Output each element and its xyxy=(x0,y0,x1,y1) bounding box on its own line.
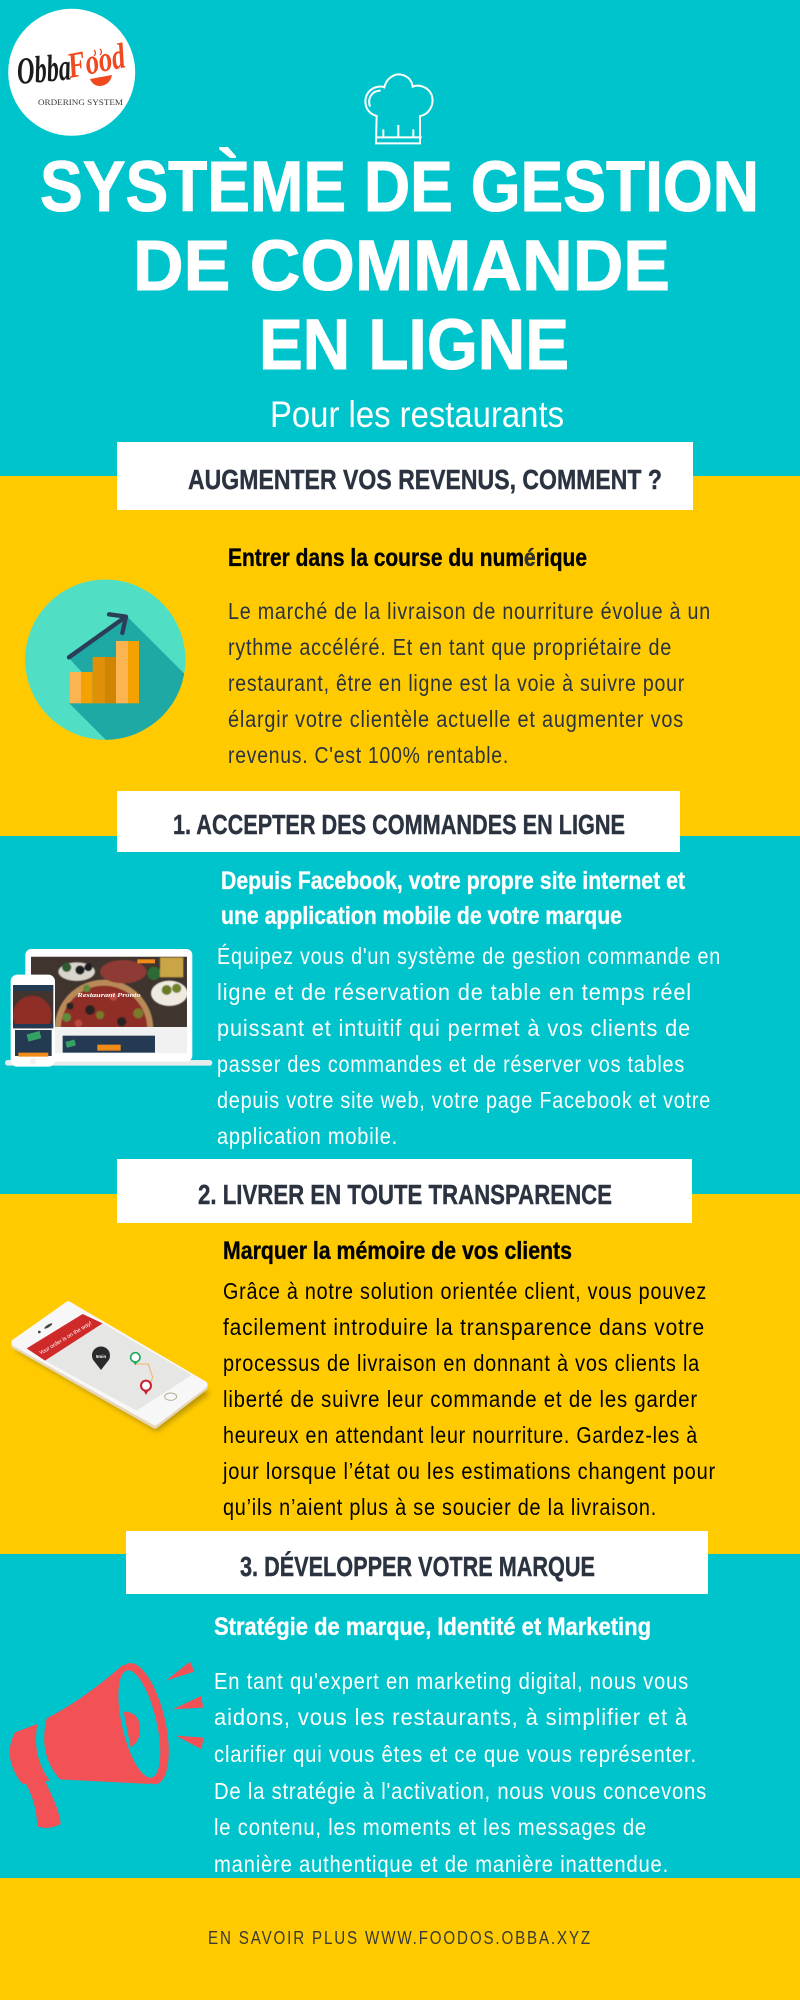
paragraph: qu’ils n’aient plus à se soucier de la livraison. xyxy=(223,1494,657,1520)
paragraph: puissant et intuitif qui permet à vos clients de xyxy=(217,1015,691,1041)
paragraph: depuis votre site web, votre page Facebook et votre xyxy=(217,1087,711,1113)
paragraph: rythme accéléré. Et en tant que propriétaire de xyxy=(228,634,672,660)
phone xyxy=(11,975,55,1067)
paragraph: passer des commandes et de réserver vos tables xyxy=(217,1051,685,1077)
heading bar: accepter des commandes xyxy=(117,791,680,852)
title: EN LIGNE xyxy=(259,306,569,385)
subheading: Marquer la mémoire de vos clients xyxy=(223,1237,572,1265)
paragraph: Grâce à notre solution orientée client, vous pouvez xyxy=(223,1278,707,1304)
icon: chef hat xyxy=(365,74,433,143)
paragraph: liberté de suivre leur commande et de les garder xyxy=(223,1386,698,1412)
paragraph: aidons, vous les restaurants, à simplifier et à xyxy=(214,1704,688,1730)
paragraph: le contenu, les moments et les messages de xyxy=(214,1814,647,1840)
icon: growth chart xyxy=(25,580,186,740)
subheading: Entrer dans la course du numérique xyxy=(228,544,587,572)
heading bar: augmenter vos revenus: AUGMENTER VOS REVENUS, COMMENT ? xyxy=(188,464,662,495)
subtitle: Pour les restaurants xyxy=(270,394,564,435)
logo: ObbaFood: ORDERING SYSTEM xyxy=(38,97,123,107)
heading bar: accepter des commandes: 1. ACCEPTER DES COMMANDES EN LIGNE xyxy=(173,809,625,840)
paragraph: facilement introduire la transparence dans votre xyxy=(223,1314,705,1340)
heading bar: livrer en toute transparence xyxy=(117,1159,692,1223)
paragraph: revenus. C'est 100% rentable. xyxy=(228,742,509,768)
illustration: phone with delivery map xyxy=(15,1305,210,1432)
paragraph xyxy=(222,1278,716,1520)
logo: ObbaFood: Obba xyxy=(15,46,73,93)
paragraph: En tant qu'expert en marketing digital, nous vous xyxy=(214,1668,689,1694)
panel: delivery section background xyxy=(0,1194,800,1554)
paragraph: application mobile. xyxy=(217,1123,398,1149)
section text: stratégie de marque xyxy=(214,1613,707,1877)
paragraph: restaurant, être en ligne est la voie à suivre pour xyxy=(228,670,685,696)
footer link text: EN SAVOIR PLUS WWW.FOODOS.OBBA.XYZ xyxy=(208,1928,592,1948)
section text: depuis facebook xyxy=(217,867,721,1149)
paragraph xyxy=(228,598,711,768)
logo: ObbaFood: Food xyxy=(63,35,129,86)
laptop xyxy=(5,949,212,1078)
illustration: phone with delivery map: 5min xyxy=(96,1354,106,1359)
paragraph: élargir votre clientèle actuelle et augmenter vos xyxy=(228,706,684,732)
paragraph: clarifier qui vous êtes et ce que vous représenter. xyxy=(214,1741,697,1767)
subheading xyxy=(221,867,686,930)
paragraph: De la stratégie à l'activation, nous vous concevons xyxy=(214,1778,707,1804)
subheading: Depuis Facebook, votre propre site internet et xyxy=(221,867,686,895)
panel: revenue section background xyxy=(0,476,800,836)
heading bar: augmenter vos revenus xyxy=(117,442,693,510)
heading bar: livrer en toute transparence: 2. LIVRER EN TOUTE TRANSPARENCE xyxy=(198,1179,612,1210)
paragraph: ligne et de réservation de table en temps réel xyxy=(217,979,692,1005)
paragraph: manière authentique et de manière inattendue. xyxy=(214,1851,669,1877)
paragraph: heureux en attendant leur nourriture. Gardez-les à xyxy=(223,1422,698,1448)
section text: entrer dans la course du numérique xyxy=(228,544,711,768)
panel: footer background xyxy=(0,1878,800,2000)
heading bar: développer votre marque xyxy=(126,1531,708,1594)
title xyxy=(40,148,759,385)
paragraph: processus de livraison en donnant à vos clients la xyxy=(223,1350,700,1376)
laptop: Restaurant Pronto xyxy=(76,992,141,999)
panel: header background xyxy=(0,0,800,476)
section text: marquer la mémoire xyxy=(222,1237,716,1520)
paragraph xyxy=(214,1668,707,1877)
icon: megaphone xyxy=(10,1658,203,1828)
paragraph: Équipez vous d'un système de gestion commande en xyxy=(217,943,721,969)
illustration: phone with delivery map: Your order is on the way! xyxy=(39,1320,93,1357)
panel: online orders section background xyxy=(0,836,800,1194)
paragraph xyxy=(217,943,721,1149)
subheading: Stratégie de marque, Identité et Marketing xyxy=(214,1613,651,1641)
illustration: laptop and phone mockup xyxy=(5,949,212,1078)
logo: ObbaFood xyxy=(8,9,135,136)
paragraph: jour lorsque l’état ou les estimations changent pour xyxy=(222,1458,716,1484)
paragraph: Le marché de la livraison de nourriture évolue à un xyxy=(228,598,711,624)
subheading: une application mobile de votre marque xyxy=(221,902,622,930)
heading bar: développer votre marque: 3. DÉVELOPPER VOTRE MARQUE xyxy=(240,1551,595,1582)
title: DE COMMANDE xyxy=(133,227,670,306)
panel: brand section background xyxy=(0,1554,800,1878)
